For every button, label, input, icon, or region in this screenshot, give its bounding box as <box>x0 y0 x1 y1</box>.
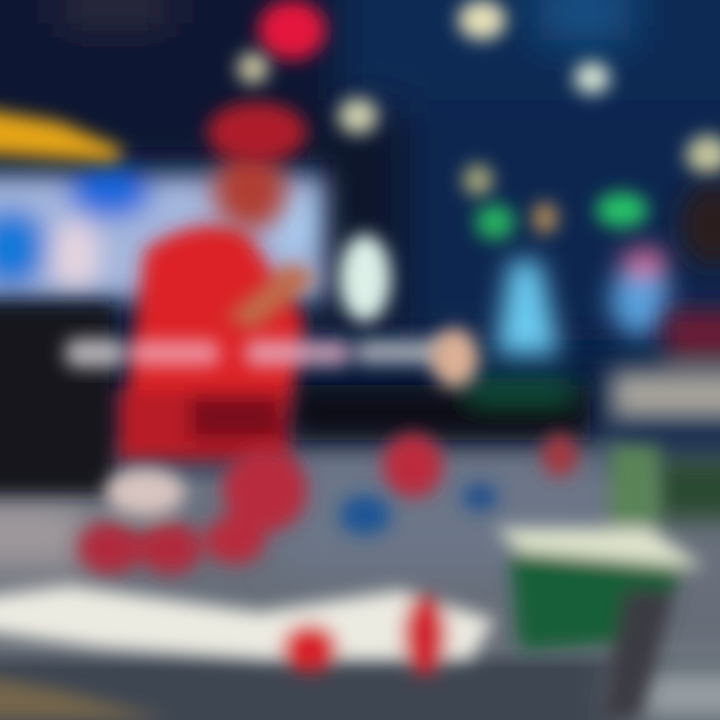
yellow awning <box>0 105 125 162</box>
arm <box>225 262 318 330</box>
blurred title text <box>65 338 455 368</box>
white glowing bottle <box>339 234 391 322</box>
hand <box>431 328 479 388</box>
red shirt <box>118 226 305 460</box>
black box at left <box>0 305 115 495</box>
red cap <box>207 102 307 162</box>
dark table band <box>290 378 590 440</box>
blue lit shape <box>495 248 670 355</box>
face <box>214 150 286 230</box>
red ball at top <box>258 0 326 60</box>
red game pieces on table <box>78 433 578 574</box>
green stack at right <box>495 445 705 720</box>
background: dark blue ceiling <box>0 0 720 340</box>
second person at right <box>610 183 720 520</box>
tan strip at bottom left <box>0 672 170 720</box>
player in red <box>118 102 318 460</box>
background: lower table area <box>0 440 720 720</box>
ceiling lights <box>237 0 720 234</box>
left panel: blue and white wall <box>0 166 325 300</box>
blue game pieces <box>339 483 498 535</box>
green lights <box>475 192 648 240</box>
white and red striped track <box>0 585 495 675</box>
